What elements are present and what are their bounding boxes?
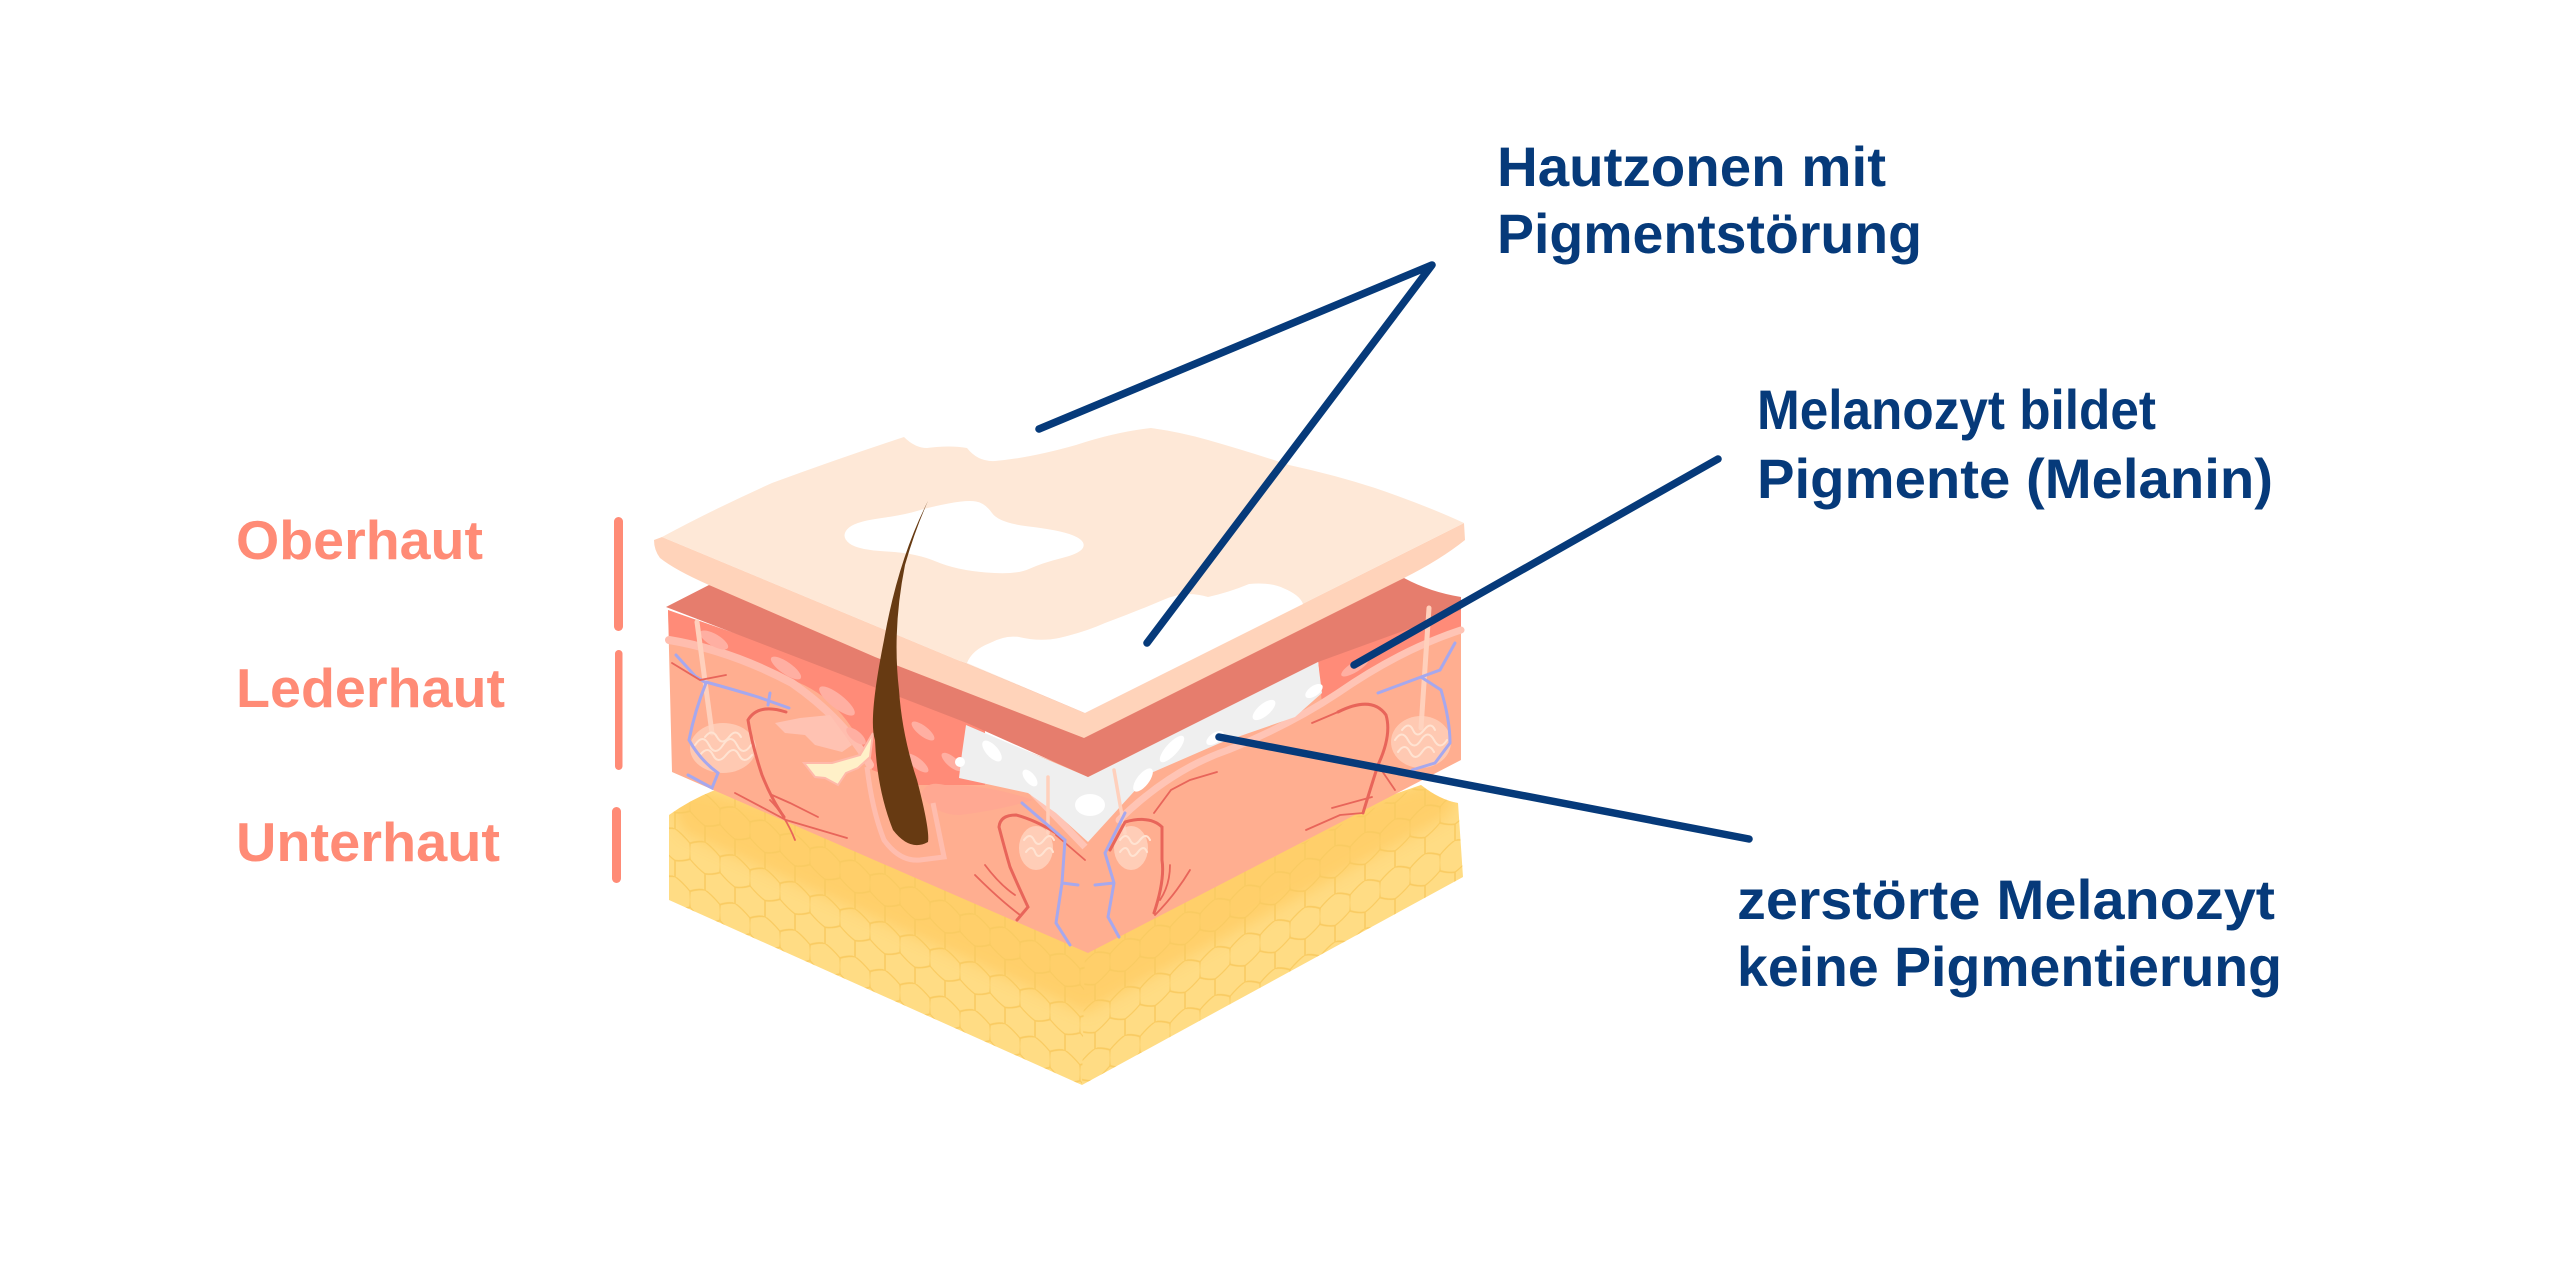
upper dermis pink right <box>1318 605 1461 705</box>
centre vessels <box>975 772 1217 945</box>
pale band left <box>669 640 870 765</box>
callout text: Melanozyt bildet Pigmente: Melanozyt bildet <box>1757 378 2156 441</box>
skin cross-section illustration <box>654 428 1470 1085</box>
sweat duct left <box>697 622 712 733</box>
callout text: zerstörte Melanozyt: keine Pigmentierung <box>1737 935 2282 998</box>
epidermis side edge <box>654 523 1465 738</box>
callout text: Melanozyt bildet Pigmente <box>1757 378 2273 510</box>
arrector muscle <box>921 784 1033 815</box>
bracket bar: Oberhaut <box>614 517 623 631</box>
bracket bar: Unterhaut <box>612 807 621 883</box>
centre glands and ducts <box>1019 770 1150 870</box>
sweat duct right <box>1421 608 1429 728</box>
pale band right <box>1119 630 1461 820</box>
label: Oberhaut: Oberhaut <box>236 509 483 571</box>
sweat gland right <box>1391 716 1451 768</box>
epidermis top face <box>662 428 1464 713</box>
callout lines <box>1039 265 1749 839</box>
fat cell texture left <box>669 790 1085 1085</box>
callout text: Melanozyt bildet Pigmente: Pigmente (Melanin) <box>1757 447 2273 510</box>
pale feather tissue <box>775 715 852 752</box>
leader: Hautzonen mit Pigmentstörung <box>1039 265 1432 643</box>
callout text: Hautzonen mit Pigmentstörung: Hautzonen mit <box>1497 135 1886 198</box>
leader: zerstörte Melanozyt <box>1219 737 1749 839</box>
layer: epidermis top plate <box>654 428 1465 738</box>
label: Lederhaut: Lederhaut <box>236 657 505 719</box>
sweat gland left <box>690 723 756 773</box>
sebaceous gland <box>804 733 873 785</box>
callout text: Hautzonen mit Pigmentstörung <box>1497 135 1922 265</box>
dark upper band <box>666 578 1461 777</box>
melanocyte remnants <box>955 681 1325 816</box>
fat darker upper band <box>660 770 1470 1013</box>
vessels left face <box>672 655 847 840</box>
dermis lower tissue <box>668 605 1461 953</box>
depigmented patch: centre <box>845 501 1084 573</box>
hair sheath <box>867 767 944 860</box>
callout text: zerstörte Melanozyt: zerstörte Melanozyt <box>1737 868 2275 931</box>
vessels right face <box>1306 643 1455 830</box>
fat cell texture right <box>1082 785 1463 1085</box>
grey zone: destroyed melanocytes <box>955 662 1325 842</box>
hair shaft <box>873 501 928 845</box>
upper dermis pink left <box>668 610 985 785</box>
depigmented patch: front <box>967 584 1303 713</box>
pigment ovals <box>697 627 731 653</box>
pale band centre <box>1033 793 1085 847</box>
callout text: Hautzonen mit Pigmentstörung: Pigmentstörung <box>1497 202 1922 265</box>
layer: subcutis fat block <box>660 770 1470 1085</box>
leader: Melanozyt <box>1354 459 1718 665</box>
callout text: zerstörte Melanozyt <box>1737 868 2282 998</box>
layer: dermis block <box>666 578 1461 953</box>
label: Unterhaut: Unterhaut <box>236 811 500 873</box>
bracket bar: Lederhaut <box>615 650 622 770</box>
fat base <box>669 785 1463 1085</box>
layer labels <box>236 509 623 883</box>
